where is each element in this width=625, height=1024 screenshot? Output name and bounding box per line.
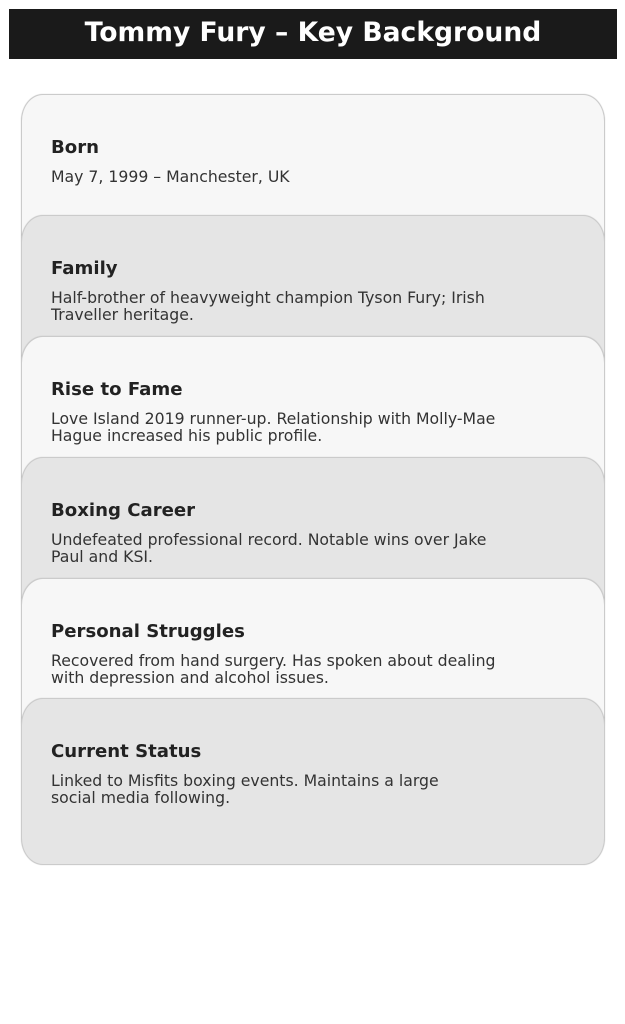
heading: personal struggles: Personal Struggles: [51, 621, 245, 642]
text: personal struggles: Recovered from hand surgery. Has spoken about dealing: [51, 651, 496, 670]
panel: born: [20, 94, 604, 260]
text: current status: Linked to Misfits boxing events. Maintains a large: [51, 771, 439, 790]
text: boxing career: Undefeated professional record. Notable wins over Jake: [51, 530, 486, 549]
panel: personal struggles: [20, 578, 604, 744]
panel: current status: [20, 698, 604, 864]
text: rise to fame: [51, 409, 495, 445]
text: rise to fame: Hague increased his public profile.: [51, 426, 322, 445]
panel: family: [20, 215, 604, 382]
heading: born: Born: [51, 137, 99, 158]
text: current status: social media following.: [51, 788, 230, 807]
heading: current status: Current Status: [51, 741, 201, 762]
text: boxing career: Paul and KSI.: [51, 547, 153, 566]
text: personal struggles: [51, 651, 496, 687]
text: rise to fame: Love Island 2019 runner-up. Relationship with Molly-Mae: [51, 409, 495, 428]
panel: rise to fame: [20, 336, 604, 502]
text: family: Traveller heritage.: [51, 305, 194, 324]
heading: rise to fame: Rise to Fame: [51, 379, 182, 400]
panel: boxing career: [20, 457, 604, 624]
text: boxing career: [51, 530, 486, 566]
heading: boxing career: Boxing Career: [51, 500, 195, 521]
text: personal struggles: with depression and alcohol issues.: [51, 668, 329, 687]
title: [9, 9, 617, 59]
text: family: Half-brother of heavyweight champion Tyson Fury; Irish: [51, 288, 485, 307]
text: family: [50, 288, 485, 324]
heading: family: Family: [51, 258, 118, 279]
text: born: May 7, 1999 – Manchester, UK: [51, 167, 290, 186]
title: Tommy Fury – Key Background: [85, 17, 541, 48]
text: current status: [51, 771, 439, 807]
